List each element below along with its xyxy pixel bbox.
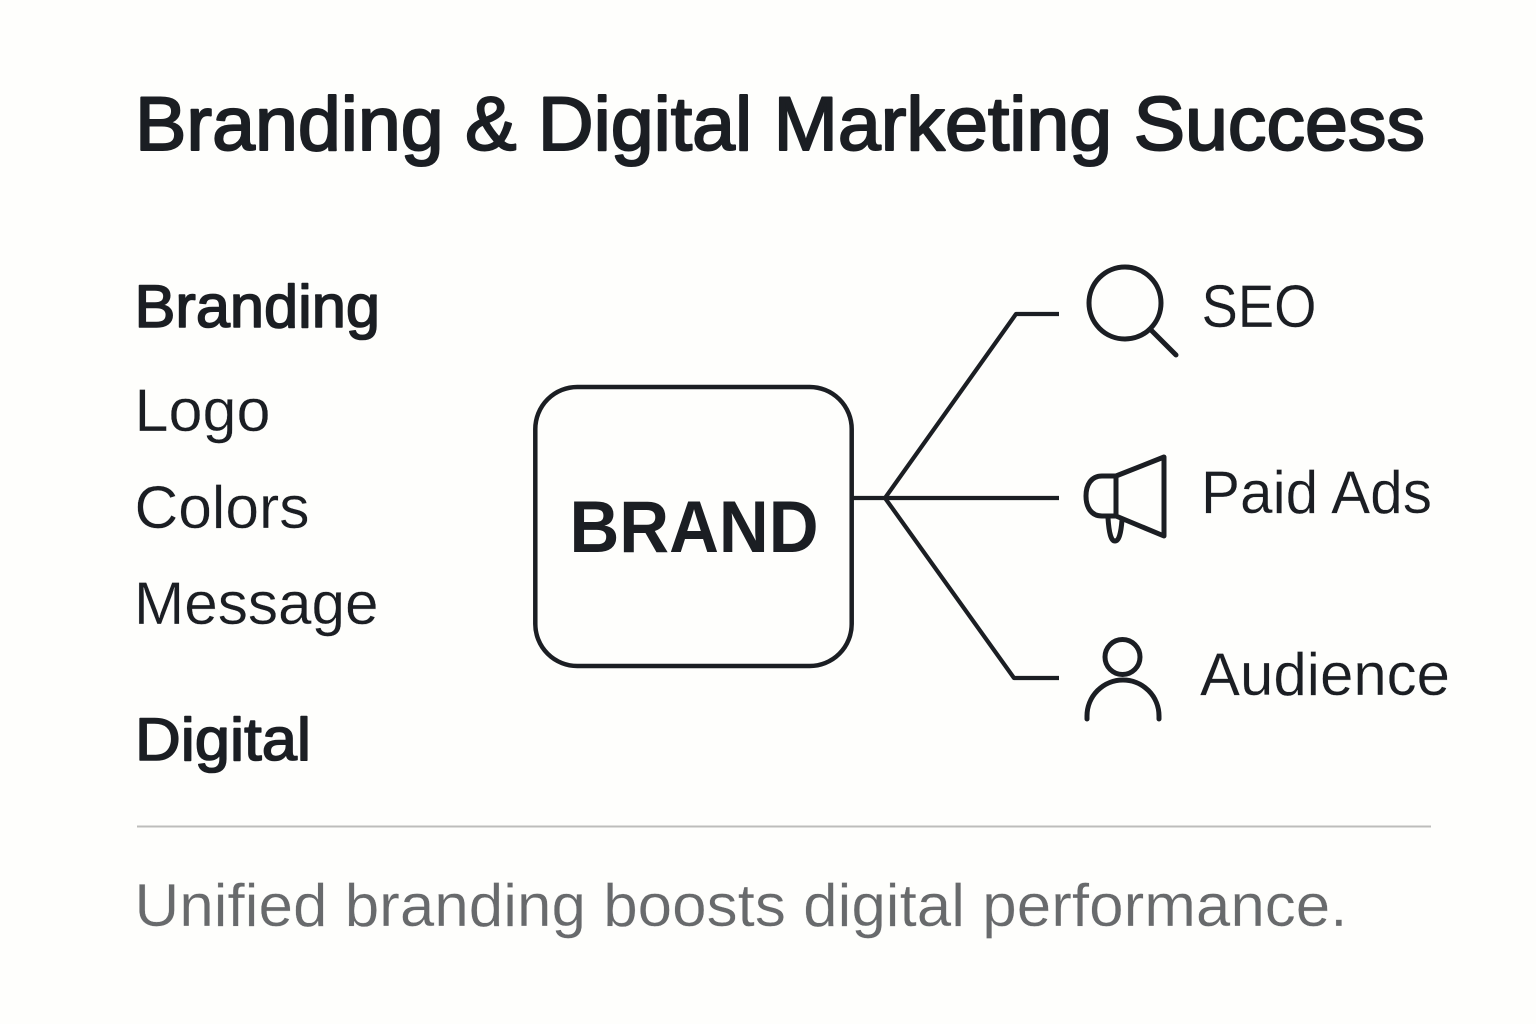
icon: person xyxy=(1087,640,1159,719)
label: Paid Ads: Paid Ads xyxy=(1201,459,1432,526)
list item: Colors: Colors xyxy=(134,474,310,541)
panel: brand box xyxy=(535,387,852,666)
list item: Logo: Logo xyxy=(134,377,270,444)
label: Audience: Audience xyxy=(1200,641,1450,708)
title: Branding & Digital Marketing Success xyxy=(135,82,1425,167)
list item: Message: Message xyxy=(134,570,378,637)
brand box outline xyxy=(535,387,852,666)
heading: Digital: Digital xyxy=(135,706,311,773)
panel: left list xyxy=(134,273,380,773)
tagline: Unified branding boosts digital performance. xyxy=(134,872,1348,939)
label: SEO: SEO xyxy=(1202,273,1316,340)
icon: megaphone xyxy=(1086,457,1164,541)
heading: Branding: Branding xyxy=(134,273,380,340)
brand label: BRAND xyxy=(570,487,818,568)
icon: magnifying glass xyxy=(1089,267,1176,355)
divider xyxy=(137,826,1431,828)
connector lines xyxy=(852,314,1059,678)
